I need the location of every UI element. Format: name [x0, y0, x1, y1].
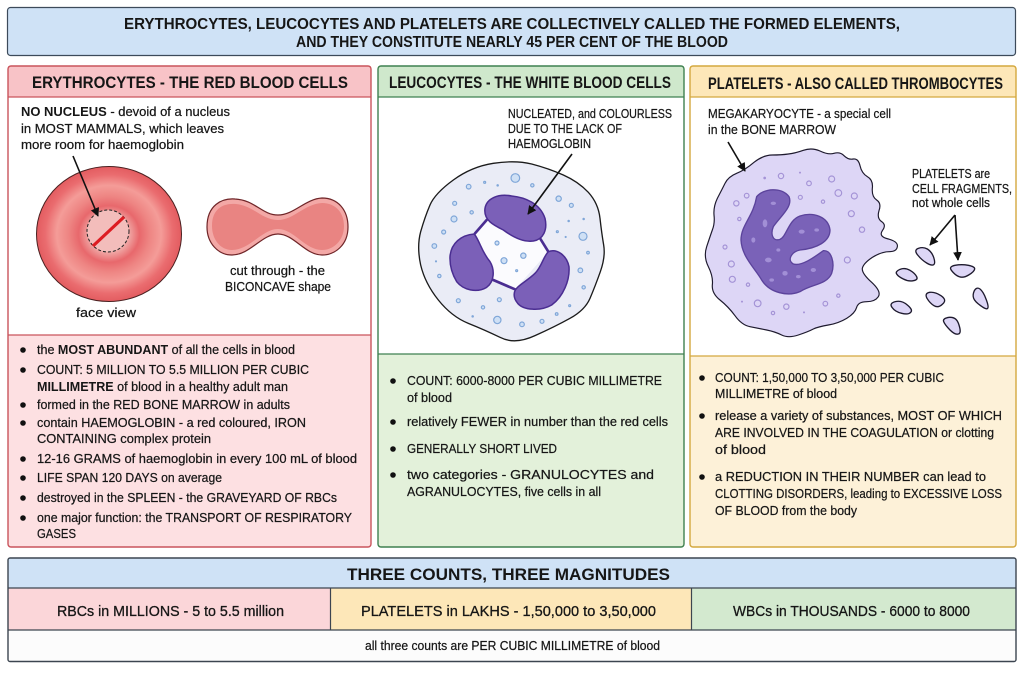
facts list: erythrocytes: formed in the RED BONE MARROW in adults	[37, 398, 290, 412]
callout: nucleated: NUCLEATED, and COLOURLESS	[508, 107, 672, 121]
heading: erythrocytes: ERYTHROCYTES - THE RED BLOOD CELLS	[32, 74, 348, 92]
heading: leucocytes: LEUCOCYTES - THE WHITE BLOOD CELLS	[389, 74, 671, 92]
facts list: leucocytes	[378, 354, 684, 547]
facts list: platelets: a REDUCTION IN THEIR NUMBER can lead to	[715, 470, 986, 484]
callout: platelets are fragments: not whole cells	[912, 196, 990, 210]
icon: megakaryocyte	[705, 149, 897, 337]
cell: WBC count	[691, 588, 1016, 630]
title banner: AND THEY CONSTITUTE NEARLY 45 PER CENT OF THE BLOOD	[296, 34, 728, 51]
title banner	[8, 8, 1016, 56]
label: face view: face view	[76, 306, 137, 320]
label: cut through: cut through - the	[230, 264, 325, 278]
facts list: platelets: MILLIMETRE of blood	[715, 387, 837, 401]
arrow: to megakaryocyte	[728, 142, 745, 171]
facts list: erythrocytes: one major function: the TRANSPORT OF RESPIRATORY	[37, 511, 353, 525]
facts list: erythrocytes: 12-16 GRAMS of haemoglobin in every 100 mL of blood	[37, 452, 357, 466]
heading: three counts: THREE COUNTS, THREE MAGNITUDES	[347, 566, 670, 584]
facts list: leucocytes: GENERALLY SHORT LIVED	[407, 442, 557, 456]
facts list: erythrocytes: CONTAINING complex protein	[37, 432, 211, 446]
facts list: erythrocytes: MILLIMETRE of blood in a healthy adult man	[37, 380, 288, 394]
facts list: erythrocytes: the MOST ABUNDANT of all the cells in blood	[37, 343, 295, 357]
facts list: erythrocytes: GASES	[37, 527, 76, 541]
facts list: erythrocytes: contain HAEMOGLOBIN - a red coloured, IRON	[37, 416, 306, 430]
label: cut through: BICONCAVE shape	[225, 280, 331, 294]
heading: platelets	[690, 66, 1016, 97]
cell: platelet count	[330, 588, 691, 630]
callout: no nucleus: more room for haemoglobin	[21, 138, 184, 152]
facts list: platelets: ARE INVOLVED IN THE COAGULATION or clotting	[715, 426, 994, 440]
facts list: platelets: CLOTTING DISORDERS, leading to EXCESSIVE LOSS	[715, 487, 1002, 501]
heading: leucocytes	[378, 66, 684, 97]
cell: platelet count: PLATELETS in LAKHS - 1,50,000 to 3,50,000	[361, 603, 656, 620]
title banner: ERYTHROCYTES, LEUCOCYTES AND PLATELETS ARE COLLECTIVELY CALLED THE FORMED ELEMENTS,	[124, 16, 900, 33]
facts list: platelets: COUNT: 1,50,000 TO 3,50,000 PER CUBIC	[715, 371, 944, 385]
callout: megakaryocyte	[708, 107, 891, 137]
arrows: to fragments	[930, 215, 958, 260]
facts list: platelets	[690, 356, 1016, 547]
arrow: to nucleus	[528, 154, 572, 214]
callout: platelets are fragments	[912, 167, 1012, 210]
cell: RBC count: RBCs in MILLIONS - 5 to 5.5 million	[57, 603, 284, 620]
callout: no nucleus: in MOST MAMMALS, which leaves	[21, 122, 224, 136]
label: cut through	[225, 264, 331, 294]
icon: white blood cell	[419, 162, 604, 341]
cell: WBC count: WBCs in THOUSANDS - 6000 to 8000	[733, 603, 970, 620]
facts list: leucocytes: two categories - GRANULOCYTES and	[407, 468, 654, 482]
panel: erythrocytes	[8, 66, 371, 547]
facts list: erythrocytes: COUNT: 5 MILLION TO 5.5 MILLION PER CUBIC	[37, 363, 309, 377]
note: per cubic millimetre	[8, 630, 1016, 661]
callout: megakaryocyte: in the BONE MARROW	[708, 123, 836, 137]
callout: nucleated: DUE TO THE LACK OF	[508, 122, 622, 136]
cell: RBC count	[8, 588, 330, 630]
facts list: leucocytes: of blood	[407, 391, 452, 405]
facts list: platelets: release a variety of substances, MOST OF WHICH	[715, 409, 1002, 423]
note: per cubic millimetre: all three counts are PER CUBIC MILLIMETRE of blood	[365, 639, 660, 653]
callout: platelets are fragments: PLATELETS are	[912, 167, 990, 181]
heading: three counts	[8, 558, 1016, 588]
facts list: erythrocytes: LIFE SPAN 120 DAYS on average	[37, 471, 222, 485]
facts list: leucocytes: COUNT: 6000-8000 PER CUBIC MILLIMETRE	[407, 374, 662, 388]
icon: platelet fragments	[891, 248, 988, 334]
icon: biconcave cross section	[207, 198, 348, 255]
facts list: erythrocytes	[8, 335, 371, 547]
panel: three counts	[8, 558, 1016, 662]
arrow: to cell centre	[73, 156, 98, 216]
callout: nucleated	[508, 107, 672, 151]
facts list: erythrocytes: destroyed in the SPLEEN - the GRAVEYARD OF RBCs	[37, 491, 337, 505]
facts list: leucocytes: relatively FEWER in number than the red cells	[407, 415, 668, 429]
facts list: leucocytes: AGRANULOCYTES, five cells in all	[407, 485, 601, 499]
callout: no nucleus: NO NUCLEUS - devoid of a nucleus	[21, 105, 230, 119]
callout: nucleated: HAEMOGLOBIN	[508, 137, 591, 151]
icon: red cell face view	[36, 166, 182, 302]
panel: platelets	[690, 66, 1016, 547]
callout: no nucleus	[21, 105, 230, 152]
callout: megakaryocyte: MEGAKARYOCYTE - a special cell	[708, 107, 891, 121]
facts list: platelets: OF BLOOD from the body	[715, 504, 858, 518]
panel: leucocytes	[378, 66, 684, 547]
heading: erythrocytes	[8, 66, 371, 97]
facts list: platelets: of blood	[715, 443, 766, 457]
